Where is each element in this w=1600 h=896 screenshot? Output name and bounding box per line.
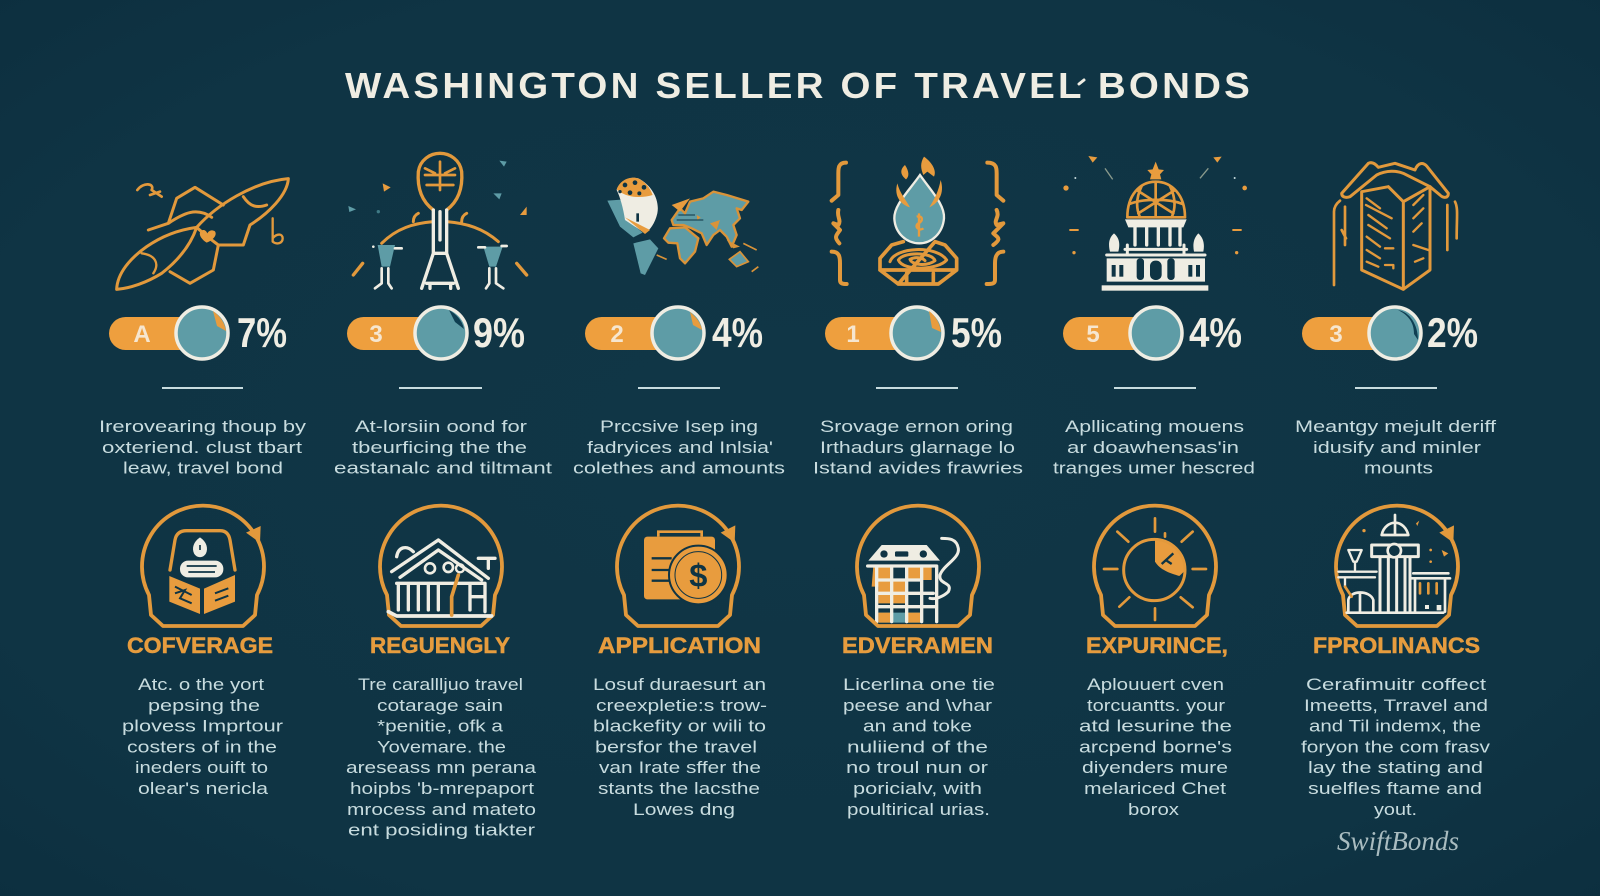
percent: 5%: 5%	[951, 309, 1002, 356]
description: no troul nun or	[846, 758, 988, 777]
icon: briefcase and dollar badge: $	[689, 557, 707, 594]
percent: 2%: 2%	[1427, 309, 1478, 356]
description: nuliiend of the	[847, 737, 988, 756]
description: suelfles ftame and	[1308, 779, 1482, 798]
icon: flame on coil with brackets	[832, 157, 1003, 284]
description: lay the stating and	[1308, 758, 1483, 777]
description: pepsing the	[148, 696, 260, 715]
percent: 7%: 7%	[237, 309, 287, 356]
description: Imeetts, Trravel and	[1304, 696, 1488, 715]
percent: 4%: 4%	[1189, 309, 1242, 356]
percent: 4%: 4%	[712, 309, 763, 356]
icon: city skyline badge	[1336, 506, 1458, 626]
description: Atc. o the yort	[138, 675, 264, 694]
description: atd lesurine the	[1079, 717, 1232, 736]
description: foryon the com frasv	[1301, 737, 1491, 756]
toggle: 1: 1	[846, 321, 860, 348]
description: ent posiding tiakter	[348, 821, 535, 840]
description: diyenders mure	[1082, 758, 1228, 777]
description: Aplouuert cven	[1087, 675, 1224, 694]
description	[1301, 675, 1491, 819]
description	[1079, 675, 1232, 819]
description	[346, 675, 537, 840]
panel: metric 1	[99, 179, 307, 478]
description: Istand avides frawries	[813, 459, 1023, 478]
description: leaw, travel bond	[123, 459, 283, 478]
panel: metric 6	[1295, 163, 1496, 478]
heading: EXPURINCE,	[1086, 633, 1228, 658]
description: blackefity or wili to	[593, 717, 766, 736]
logo: SwiftBonds: SwiftBonds	[1337, 826, 1459, 856]
description	[334, 417, 552, 478]
description	[1295, 417, 1496, 478]
panel: application	[593, 506, 767, 819]
panel: coverage	[122, 506, 283, 798]
description: colethes and amounts	[573, 459, 785, 478]
heading: REGUENGLY	[370, 633, 510, 658]
description: poultirical urias.	[847, 800, 990, 819]
panel: metric 3	[573, 178, 785, 478]
description: Cerafimuitr coffect	[1306, 675, 1486, 694]
description: Licerlina one tie	[843, 675, 995, 694]
description: At-lorsiin oond for	[355, 417, 527, 436]
description: yout.	[1374, 800, 1417, 819]
toggle: 5	[1063, 307, 1182, 359]
toggle: 3: 3	[1329, 321, 1343, 348]
description: Losuf duraesurt an	[593, 675, 766, 694]
description: areseass mn perana	[346, 758, 537, 777]
heading: APPLICATION	[598, 633, 761, 658]
description: Prccsive Isep ing	[600, 417, 758, 436]
description	[843, 675, 995, 819]
description: arcpend borne's	[1079, 737, 1232, 756]
description: olear's nericla	[138, 779, 269, 798]
description: melariced Chet	[1084, 779, 1226, 798]
icon: capitol dome	[1063, 156, 1247, 291]
description: plovess Imprtour	[122, 717, 283, 736]
description: Tre carallljuo travel	[358, 675, 523, 694]
description: mounts	[1364, 459, 1433, 478]
description: ineders ouift to	[135, 758, 268, 777]
icon: world map	[607, 178, 758, 275]
panel: endorsement	[842, 506, 995, 819]
description: Irthadurs glarnage lo	[820, 438, 1015, 457]
percent: 9%: 9%	[473, 309, 525, 356]
description: mrocess and mateto	[347, 800, 536, 819]
description: costers of in the	[127, 737, 277, 756]
description: hoipbs 'b-mrepaport	[350, 779, 534, 798]
description: eastanalc and tiltmant	[334, 459, 552, 478]
toggle: 3	[1302, 307, 1421, 359]
description: creexpletie:s trow-	[596, 696, 767, 715]
icon: house badge	[380, 506, 502, 626]
description: bersfor the travel	[595, 737, 757, 756]
toggle: 1	[825, 307, 943, 359]
toggle: 5: 5	[1086, 321, 1100, 348]
icon: folded plane leaf	[117, 179, 288, 289]
description: an and toke	[863, 717, 972, 736]
icon: building badge	[857, 506, 979, 626]
description: peese and \vhar	[843, 696, 992, 715]
description: fadryices and Inlsia'	[587, 438, 773, 457]
description	[122, 675, 283, 798]
panel: metric 5	[1053, 156, 1255, 478]
description	[1053, 417, 1255, 478]
description: Lowes dng	[633, 800, 735, 819]
description: stants the lacsthe	[598, 779, 760, 798]
description: Meantgy mejult deriff	[1295, 417, 1496, 436]
description: Irerovearing thoup by	[99, 417, 307, 436]
heading: COFVERAGE	[127, 633, 273, 658]
description	[99, 417, 307, 478]
description: Srovage ernon oring	[820, 417, 1013, 436]
description: idusify and minler	[1313, 438, 1481, 457]
toggle: A: A	[133, 321, 151, 348]
toggle: A	[109, 307, 228, 359]
icon: briefcase and dollar badge	[617, 506, 739, 626]
description	[813, 417, 1023, 478]
panel: metric 4	[813, 157, 1023, 478]
description: and Til indemx, the	[1309, 717, 1481, 736]
description: borox	[1128, 800, 1180, 819]
panel: metric 2	[334, 153, 552, 478]
description	[593, 675, 767, 819]
description: poricialv, with	[853, 779, 982, 798]
toggle: 2: 2	[610, 321, 624, 348]
icon: coverage badge	[142, 506, 264, 626]
title: WASHINGTON SELLER OF TRAVEL BONDS	[345, 65, 1253, 106]
description: Yovemare. the	[377, 737, 506, 756]
description: tranges umer hescred	[1053, 459, 1255, 478]
panel: performance	[1301, 506, 1491, 819]
description: tbeurficing the the	[352, 438, 527, 457]
description: ar doawhensas'in	[1067, 438, 1239, 457]
icon: dial badge	[1094, 506, 1216, 626]
toggle: 3	[347, 307, 467, 359]
description: van Irate sffer the	[599, 758, 761, 777]
panel: regulatory	[346, 506, 537, 840]
toggle: 3: 3	[369, 321, 383, 348]
heading: FPROLINANCS	[1313, 633, 1480, 658]
description: torcuantts. your	[1087, 696, 1225, 715]
description: Apllicating mouens	[1065, 417, 1244, 436]
icon: hands over box	[1334, 163, 1457, 289]
description: oxteriend. clust tbart	[102, 438, 302, 457]
description: cotarage sain	[377, 696, 503, 715]
toggle: 2	[585, 307, 704, 359]
panel: experience	[1079, 506, 1232, 819]
description	[573, 417, 785, 478]
heading: EDVERAMEN	[842, 633, 993, 658]
description: *penitie, ofk a	[377, 717, 504, 736]
icon: tower with figures	[348, 153, 527, 288]
